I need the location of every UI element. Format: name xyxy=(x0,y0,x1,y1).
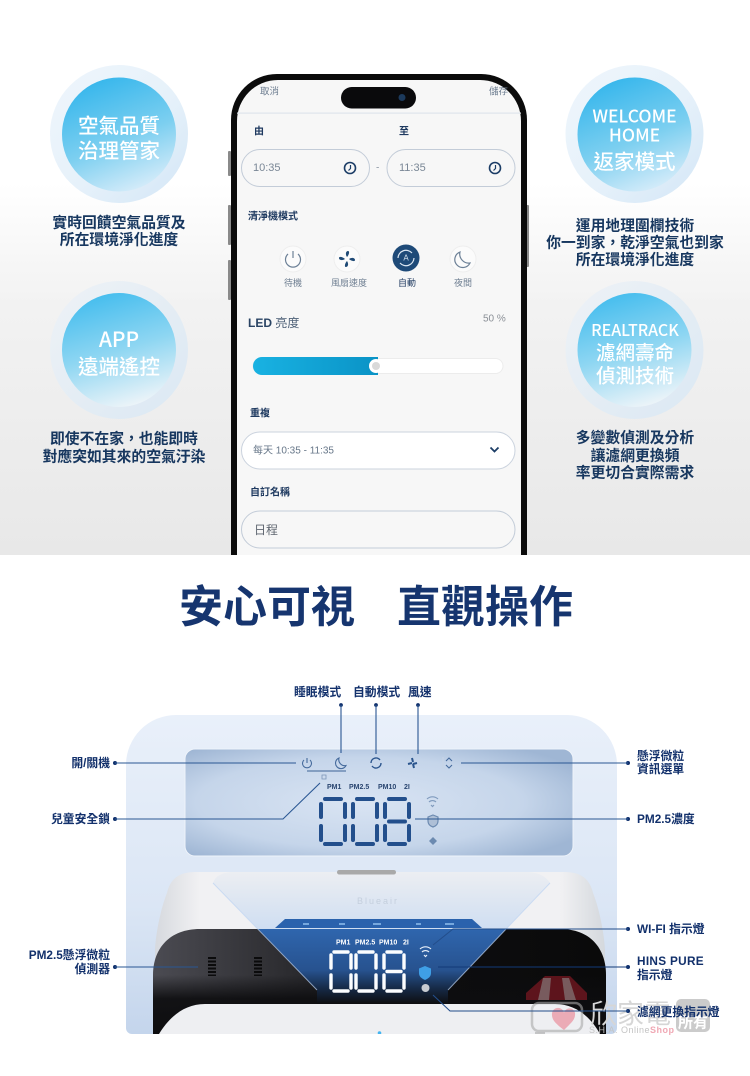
description: app remote control xyxy=(43,428,206,466)
LCD metric labels xyxy=(327,784,410,791)
callout: power xyxy=(71,756,296,770)
LED brightness slider: LED 亮度 xyxy=(248,315,299,330)
feature: air quality manager xyxy=(50,65,188,250)
badge: realtrack xyxy=(566,281,704,419)
callout: fan speed xyxy=(408,685,432,754)
callout: particle info menu: 資訊選單 xyxy=(637,762,684,776)
LCD metric labels: 2I xyxy=(404,784,410,791)
LCD metric labels: PM10 xyxy=(378,784,396,791)
phone header: 儲存 xyxy=(489,86,509,98)
callout: wifi indicator xyxy=(433,922,705,945)
LED brightness slider xyxy=(248,314,506,375)
title xyxy=(179,571,573,635)
title: 直觀操作 xyxy=(397,571,573,635)
callout: wifi indicator: WI-FI 指示燈 xyxy=(637,922,705,936)
callout: HINS PURE indicator: 指示燈 xyxy=(637,968,673,982)
device status lights xyxy=(419,947,431,992)
badge: app remote control: 遠端遙控 xyxy=(78,350,160,380)
time range: - xyxy=(376,162,379,174)
callout: power: 開/關機 xyxy=(71,756,110,770)
description: app remote control: 對應突如其來的空氣汙染 xyxy=(43,446,206,466)
callout: particle info menu xyxy=(461,749,684,776)
description: air quality manager: 所在環境淨化進度 xyxy=(60,228,178,250)
callout: PM2.5 concentration: PM2.5濃度 xyxy=(637,812,695,826)
badge: realtrack: REALTRACK xyxy=(591,317,679,341)
custom name field: 自訂名稱 xyxy=(250,486,290,498)
time range: 至 xyxy=(399,126,409,138)
callout: HINS PURE indicator: HINS PURE xyxy=(637,954,704,968)
time range: 11:35 xyxy=(399,162,426,174)
callout: particle info menu: 懸浮微粒 xyxy=(637,749,684,763)
time range xyxy=(242,124,515,186)
device metric labels: PM1 xyxy=(336,940,350,946)
badge: air quality manager: 空氣品質 xyxy=(78,109,160,139)
badge: welcome home xyxy=(566,65,704,203)
badge: realtrack: 偵測技術 xyxy=(596,360,674,388)
feature: app remote control xyxy=(43,281,206,466)
device metric labels: 2I xyxy=(403,940,409,946)
purifier mode selector: 風扇速度 xyxy=(331,277,367,288)
callout: filter replacement indicator: 濾網更換指示燈 xyxy=(637,1005,720,1019)
callout: child lock xyxy=(51,783,320,826)
custom name field xyxy=(242,486,515,548)
repeat dropdown: 每天 10:35 - 11:35 xyxy=(253,444,334,456)
LCD touch icons xyxy=(303,757,452,779)
callout: sleep mode xyxy=(294,685,343,753)
description: air quality manager xyxy=(52,212,186,250)
description: welcome home: 所在環境淨化進度 xyxy=(576,248,694,270)
description: realtrack: 多變數偵測及分析 xyxy=(576,426,694,448)
callout: filter replacement indicator xyxy=(433,995,720,1019)
projection cone on top of device xyxy=(214,878,550,929)
top section background xyxy=(0,0,750,555)
device metric labels: PM10 xyxy=(379,940,397,946)
callout: PM2.5 sensor: 偵測器 xyxy=(75,962,110,976)
callout: PM2.5 sensor xyxy=(29,948,198,976)
purifier mode selector: A xyxy=(403,254,409,262)
description: air quality manager: 實時回饋空氣品質及 xyxy=(52,212,186,232)
callout: child lock: 兒童安全鎖 xyxy=(51,812,110,826)
LCD metric labels: PM1 xyxy=(327,784,342,791)
badge: app remote control: APP xyxy=(99,324,139,354)
LED brightness slider: 50 % xyxy=(483,314,506,324)
badge: air quality manager xyxy=(50,65,188,203)
purifier mode selector xyxy=(248,210,476,288)
description: welcome home: 你一到家，乾淨空氣也到家 xyxy=(546,232,724,252)
description: welcome home: 運用地理圍欄技術 xyxy=(576,214,694,236)
panel background xyxy=(126,715,617,1034)
title: 安心可視 xyxy=(179,571,355,635)
handle slot xyxy=(337,870,396,874)
device seven-segment reading 008 xyxy=(331,952,404,991)
watermark: 所有 xyxy=(678,1014,708,1032)
callout: PM2.5 sensor: PM2.5懸浮微粒 xyxy=(29,948,110,962)
purifier mode selector: 待機 xyxy=(284,277,302,288)
LCD status icons xyxy=(427,797,438,845)
purifier mode selector: 清淨機模式 xyxy=(248,210,298,222)
callout: fan speed: 風速 xyxy=(408,685,432,699)
callout: PM2.5 concentration xyxy=(415,812,695,826)
black front band xyxy=(153,929,606,1034)
watermark xyxy=(526,976,710,1035)
white lower panel xyxy=(159,1004,600,1034)
description: welcome home xyxy=(546,214,724,270)
phone notch xyxy=(341,87,416,108)
device metric labels xyxy=(336,940,408,944)
purifier mode selector: 自動 xyxy=(398,277,416,288)
callout: auto mode xyxy=(353,685,400,754)
air purifier device xyxy=(153,870,606,1035)
watermark: S.H.A. OnlineShop xyxy=(589,1025,675,1035)
repeat dropdown: 重複 xyxy=(250,406,270,420)
badge: air quality manager: 治理管家 xyxy=(78,134,160,164)
time range: 10:35 xyxy=(253,162,281,174)
blue touch bar xyxy=(275,919,482,928)
badge: welcome home: 返家模式 xyxy=(594,145,676,175)
LCD metric labels: PM2.5 xyxy=(349,784,369,791)
badge: app remote control xyxy=(50,281,188,419)
enlarged LCD screen xyxy=(185,749,573,856)
blue illuminated display area xyxy=(258,929,506,1004)
badge: welcome home: HOME xyxy=(609,122,660,148)
callout: sleep mode: 睡眠模式 xyxy=(294,685,341,699)
LCD seven-segment reading 008 xyxy=(321,799,409,844)
phone mockup xyxy=(228,74,529,555)
repeat dropdown xyxy=(242,406,515,469)
air purifier device: Blueair xyxy=(357,896,399,906)
phone header: 取消 xyxy=(260,86,279,98)
device metric labels: PM2.5 xyxy=(355,940,375,946)
callout: auto mode: 自動模式 xyxy=(353,685,400,699)
badge: welcome home: WELCOME xyxy=(592,104,677,128)
badge: realtrack: 濾網壽命 xyxy=(596,336,674,366)
sensor vents xyxy=(208,957,262,976)
phone header xyxy=(237,86,521,114)
callout: HINS PURE indicator xyxy=(438,954,704,982)
purifier mode selector: 夜間 xyxy=(454,277,472,288)
watermark: 欣家電 xyxy=(590,992,671,1032)
feature: realtrack xyxy=(566,281,704,482)
custom name field: 日程 xyxy=(254,523,278,537)
feature: welcome home xyxy=(546,65,724,270)
description: realtrack xyxy=(576,426,694,482)
description: realtrack: 率更切合實際需求 xyxy=(576,462,694,482)
description: app remote control: 即使不在家，也能即時 xyxy=(50,428,198,448)
control panel diagram xyxy=(126,715,617,1035)
time range: 由 xyxy=(254,124,264,138)
description: realtrack: 讓濾網更換頻 xyxy=(591,444,680,466)
